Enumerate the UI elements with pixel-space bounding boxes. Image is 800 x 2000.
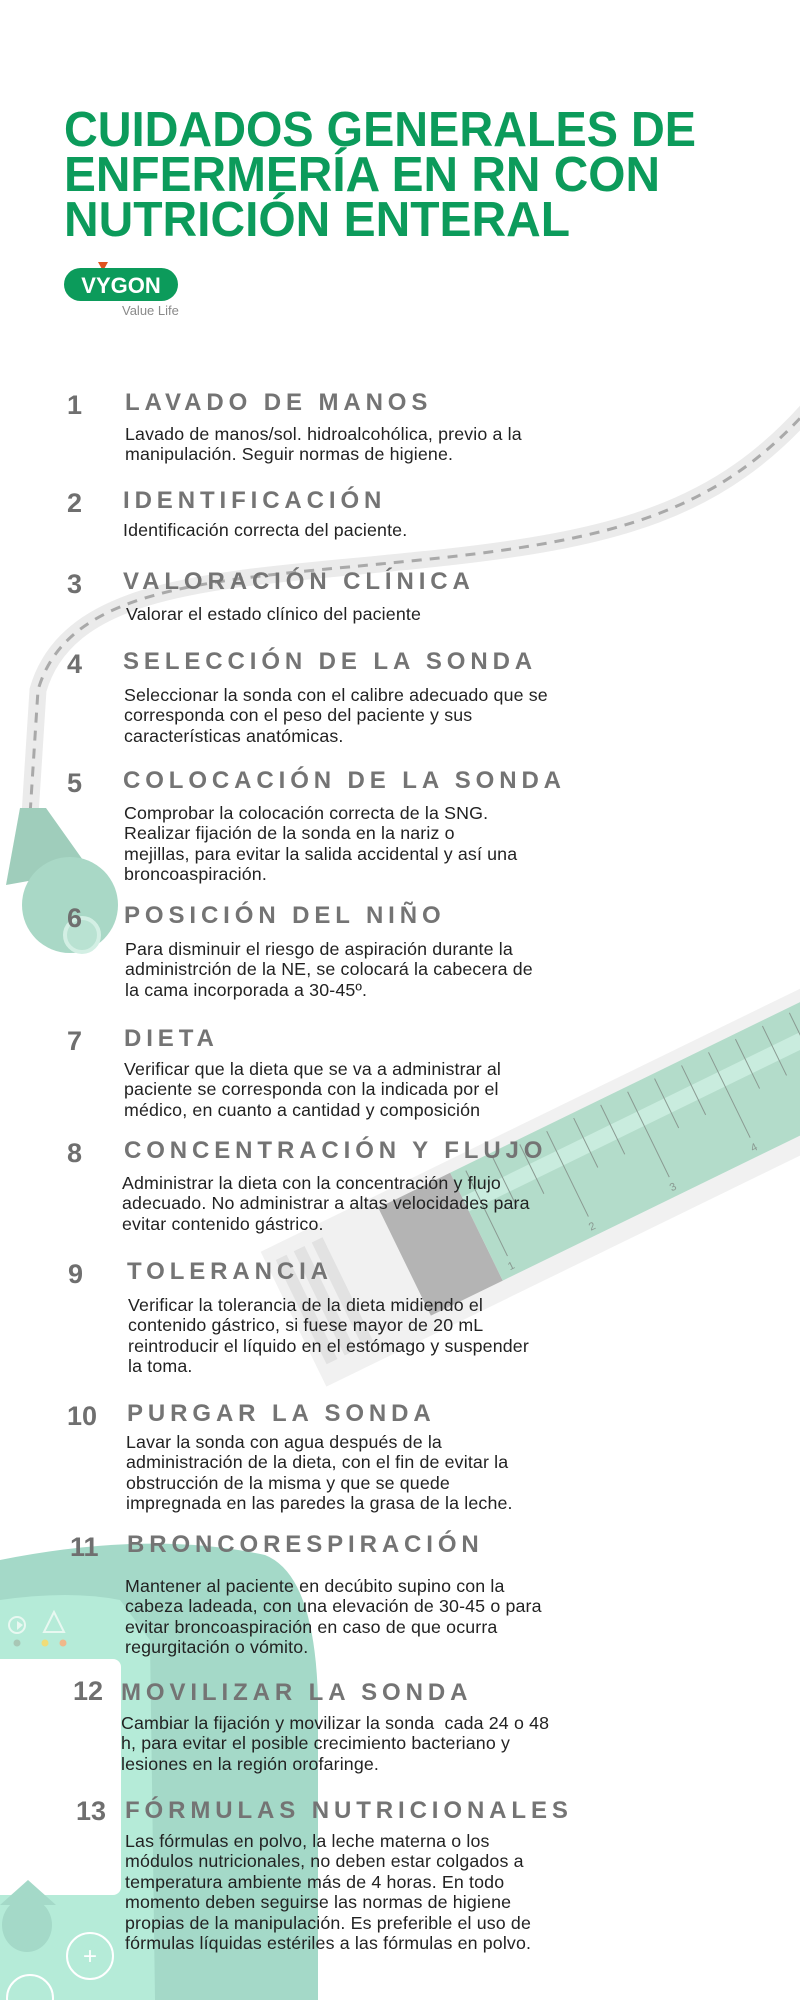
text: Verificar que la dieta que se va a administrar al [124,1059,501,1079]
text: 8 [67,1138,82,1168]
text: 12 [73,1676,103,1706]
text: Lavar la sonda con agua después de la [126,1432,442,1452]
title: ENFERMERÍA EN RN CON [64,148,660,202]
text: FÓRMULAS NUTRICIONALES [125,1797,573,1824]
text: 6 [67,903,82,933]
item 1 [67,389,522,464]
text: BRONCORESPIRACIÓN [127,1531,484,1558]
item 5 [67,766,566,884]
text: obstrucción de la misma y que se quede [126,1473,450,1493]
text: 7 [67,1026,82,1056]
text: POSICIÓN DEL NIÑO [124,902,446,929]
text: VALORACIÓN CLÍNICA [123,568,475,595]
text: SELECCIÓN DE LA SONDA [123,648,537,675]
text: módulos nutricionales, no deben estar colgados a [125,1851,524,1871]
text: IDENTIFICACIÓN [123,487,386,514]
text: momento deben seguirse las normas de higiene [125,1892,511,1912]
text: reintroducir el líquido en el estómago y suspender [128,1336,529,1356]
text: Lavado de manos/sol. hidroalcohólica, previo a la [125,424,522,444]
text: Seleccionar la sonda con el calibre adecuado que se [124,685,548,705]
text: 4 [67,649,82,679]
text: DIETA [124,1025,219,1052]
text: mejillas, para evitar la salida accidental y así una [124,844,517,864]
syringe: 3 [668,1181,679,1194]
syringe [261,899,800,1387]
tube [30,405,800,815]
text: TOLERANCIA [127,1258,333,1285]
text: evitar broncoaspiración en caso de que ocurra [125,1617,497,1637]
syringe: 1 [506,1260,517,1273]
syringe: 2 [587,1220,598,1234]
text: broncoaspiración. [124,864,267,884]
text: Realizar fijación de la sonda en la nariz o [124,823,455,843]
text: Cambiar la fijación y movilizar la sonda cada 24 o 48 [121,1713,549,1733]
text: 5 [67,768,82,798]
text: adecuado. No administrar a altas velocidades para [122,1193,530,1213]
text: 3 [67,569,82,599]
item 4 [67,647,548,746]
text: cabeza ladeada, con una elevación de 30-45 o para [125,1596,542,1616]
text: evitar contenido gástrico. [122,1214,324,1234]
text: impregnada en las paredes la grasa de la leche. [126,1493,513,1513]
item 8 [67,1136,547,1234]
text: la cama incorporada a 30-45º. [125,980,367,1000]
text: Comprobar la colocación correcta de la SNG. [124,803,488,823]
syringe: 4 [749,1141,760,1155]
text: manipulación. Seguir normas de higiene. [125,444,453,464]
text: características anatómicas. [124,726,343,746]
text: 1 [67,390,82,420]
text: fórmulas líquidas estériles a las fórmulas en polvo. [125,1933,531,1953]
text: 10 [67,1401,97,1431]
text: h, para evitar el posible crecimiento bacteriano y [121,1733,510,1753]
text: Mantener al paciente en decúbito supino con la [125,1576,505,1596]
text: la toma. [128,1356,192,1376]
text: paciente se corresponda con la indicada por el [124,1079,499,1099]
text: 9 [68,1259,83,1289]
logo: Vygon: Value Life [122,303,179,318]
title: NUTRICIÓN ENTERAL [64,192,570,247]
text: lesiones en la región orofaringe. [121,1754,379,1774]
text: administración de la dieta, con el fin de evitar la [126,1452,508,1472]
text: corresponda con el peso del paciente y sus [124,705,472,725]
text: temperatura ambiente más de 4 horas. En todo [125,1872,504,1892]
text: Para disminuir el riesgo de aspiración durante la [125,939,513,959]
item 3 [67,567,475,624]
device bottom-left [0,1544,318,2000]
logo: Vygon: VYGON [81,273,161,298]
text: CONCENTRACIÓN Y FLUJO [124,1137,547,1164]
text: Verificar la tolerancia de la dieta midiendo el [128,1295,483,1315]
logo: Vygon [64,262,179,318]
text: COLOCACIÓN DE LA SONDA [123,767,566,794]
item 6 [67,901,533,1000]
text: 13 [76,1796,106,1826]
text: LAVADO DE MANOS [125,389,432,416]
text: 2 [67,488,82,518]
text: administrción de la NE, se colocará la cabecera de [125,959,533,979]
item 10 [67,1400,513,1513]
item 12 [73,1676,549,1774]
text: propias de la manipulación. Es preferible el uso de [125,1913,531,1933]
text: Las fórmulas en polvo, la leche materna o los [125,1831,490,1851]
item 2 [67,486,407,540]
item 7 [67,1025,501,1120]
item 11 [70,1530,542,1657]
text: contenido gástrico, si fuese mayor de 20 mL [128,1315,483,1335]
text: regurgitación o vómito. [125,1637,308,1657]
title [64,103,696,247]
text: médico, en cuanto a cantidad y composición [124,1100,480,1120]
item 13 [76,1796,573,1953]
text: Administrar la dieta con la concentración y flujo [122,1173,501,1193]
text: PURGAR LA SONDA [127,1400,436,1427]
text: 11 [70,1532,99,1562]
device bottom-left: + [83,1943,97,1970]
title: CUIDADOS GENERALES DE [64,103,696,157]
text: Identificación correcta del paciente. [123,520,407,540]
text: MOVILIZAR LA SONDA [121,1679,472,1706]
text: Valorar el estado clínico del paciente [126,604,421,624]
item 9 [68,1258,529,1376]
connector [6,808,118,953]
